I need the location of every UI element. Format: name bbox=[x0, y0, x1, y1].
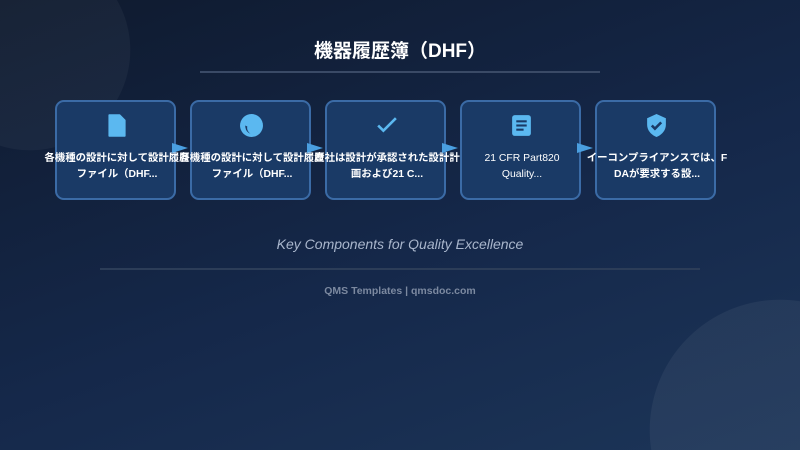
text 5: イーコンプライアンスでは、F bbox=[587, 153, 727, 164]
text 1: 各機種の設計に対して設計履歴 bbox=[44, 153, 190, 164]
text 2 bbox=[179, 152, 325, 180]
card 5 bbox=[595, 100, 716, 200]
text 4: Quality... bbox=[502, 168, 542, 180]
icon: shield check bbox=[647, 114, 666, 137]
arrow 2 bbox=[307, 143, 323, 153]
arrow 4 bbox=[577, 143, 593, 153]
text 1 bbox=[44, 152, 190, 180]
card 4 bbox=[460, 100, 581, 200]
card 3 bbox=[325, 100, 446, 200]
text 5 bbox=[587, 152, 727, 180]
text 2: 各機種の設計に対して設計履歴 bbox=[179, 153, 325, 164]
icon: check bbox=[377, 117, 397, 132]
footer: QMS Templates | qmsdoc.com bbox=[324, 285, 476, 297]
text 3: 貴社は設計が承認された設計計 bbox=[314, 153, 460, 164]
text 3 bbox=[314, 152, 460, 180]
text 4: 21 CFR Part820 bbox=[484, 153, 560, 164]
text 1: ファイル（DHF... bbox=[77, 168, 157, 180]
text 2: ファイル（DHF... bbox=[212, 168, 292, 180]
title: 機器履歴簿（DHF） bbox=[314, 41, 486, 62]
arrow 3 bbox=[442, 143, 458, 153]
icon: list document bbox=[512, 115, 531, 136]
arrow 1 bbox=[172, 143, 188, 153]
card 1 bbox=[55, 100, 176, 200]
subtitle: Key Components for Quality Excellence bbox=[277, 236, 523, 252]
text 5: DAが要求する設... bbox=[614, 168, 700, 180]
icon: document bbox=[108, 114, 126, 137]
text 3: 画および21 C... bbox=[351, 168, 423, 180]
card 2 bbox=[190, 100, 311, 200]
icon: circle bbox=[240, 114, 263, 137]
text 4 bbox=[484, 153, 560, 180]
